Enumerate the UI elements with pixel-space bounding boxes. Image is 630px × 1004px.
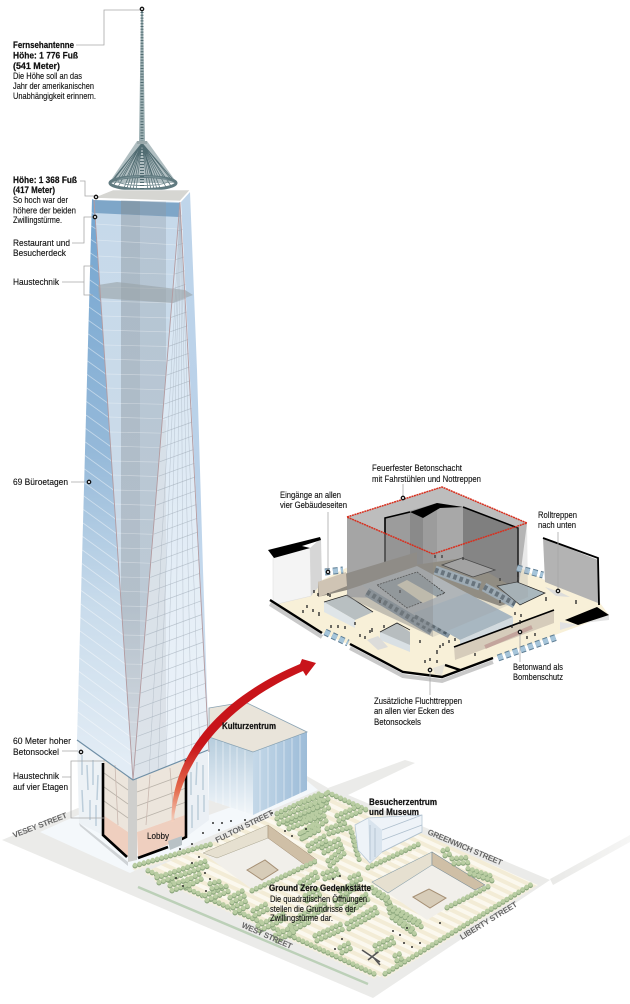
memorial pool: south	[372, 852, 485, 920]
street labels: FULTON STREET	[214, 808, 276, 845]
inset left wall	[268, 537, 322, 605]
podium shards	[82, 755, 204, 828]
tower	[77, 10, 209, 790]
label: restaurant: Besucherdeck	[13, 248, 66, 258]
street labels: LIBERTY STREET	[458, 899, 520, 942]
ground: streets	[2, 760, 630, 998]
podium left panel	[77, 740, 103, 835]
label: lobby: Lobby	[147, 831, 169, 841]
label: emergency stairs: an allen vier Ecken des	[374, 706, 454, 716]
bomb protection wall	[454, 610, 554, 660]
label: entrances	[280, 490, 347, 510]
central pit	[362, 566, 480, 625]
label: memorial	[269, 883, 371, 923]
label: bomb wall: Bombenschutz	[513, 672, 563, 682]
label: emergency stairs: Zusätzliche Fluchttreppen	[374, 696, 462, 706]
label: cultural center: Kulturzentrum	[222, 721, 276, 731]
label: roof height: Zwillingstürme.	[13, 215, 62, 225]
label: roof height: höhere der beiden	[13, 206, 76, 216]
inset corner block	[560, 607, 609, 630]
label: restaurant	[13, 238, 70, 258]
antenna	[139, 10, 145, 142]
core back walls	[347, 487, 528, 606]
central slab	[413, 593, 513, 648]
label: visitor center	[369, 797, 437, 817]
label: concrete base	[13, 736, 71, 757]
concrete walkway wall	[318, 552, 417, 597]
core translucent faces	[347, 517, 528, 637]
leader lines	[62, 7, 560, 818]
label: antenna	[13, 40, 96, 101]
label: escalators: Rolltreppen	[538, 510, 577, 520]
inset right wall	[543, 538, 599, 605]
entrance stone wall	[318, 572, 347, 597]
label: visitor center: Besucherzentrum	[369, 797, 437, 807]
street labels: GREENWICH STREET	[426, 828, 505, 868]
label: emergency stairs	[374, 696, 462, 727]
visitor center and museum	[355, 815, 422, 863]
label: core: mit Fahrstühlen und Nottreppen	[372, 474, 481, 484]
visitors in plaza	[176, 812, 440, 950]
core floor	[415, 558, 528, 606]
label: antenna: Fernsehantenne	[13, 40, 74, 50]
left pit	[324, 595, 373, 628]
podium right panel	[186, 750, 209, 837]
label: antenna: Die Höhe soll an das	[13, 71, 82, 81]
tower site pavement	[40, 780, 318, 873]
label: antenna: (541 Meter)	[13, 61, 60, 71]
inset outer floor edge	[270, 600, 493, 681]
floor lines: front wedge	[95, 224, 179, 751]
right sliver	[181, 192, 209, 752]
people	[303, 555, 576, 663]
label: memorial: Ground Zero Gedenkstätte	[269, 883, 371, 893]
lobby glow	[103, 815, 128, 857]
label: roof height: So hoch war der	[13, 195, 68, 205]
street labels: VESEY STREET	[11, 810, 70, 840]
roof plate	[93, 190, 190, 201]
entrance doors	[325, 568, 557, 658]
right face	[130, 202, 209, 790]
label: concrete base: Betonsockel	[13, 747, 59, 757]
label: antenna: Unabhängigkeit erinnern.	[13, 91, 96, 101]
label: core: Feuerfester Betonschacht	[372, 463, 462, 473]
lower pit	[380, 623, 410, 652]
inset floor	[270, 525, 609, 678]
label: roof height: (417 Meter)	[13, 185, 55, 195]
top band	[93, 200, 180, 217]
label: restaurant: Restaurant und	[13, 238, 70, 248]
plaza	[138, 792, 538, 984]
west street green strip	[138, 887, 368, 984]
label: mechanical floors: Haustechnik	[13, 277, 59, 287]
memorial pool: north	[203, 825, 317, 890]
label: antenna: Jahr der amerikanischen	[13, 81, 94, 91]
trees	[135, 792, 533, 978]
window strips	[367, 570, 515, 634]
front wedge	[94, 200, 180, 790]
sculpture in plaza	[362, 950, 380, 965]
label: antenna: Höhe: 1 776 Fuß	[13, 50, 78, 60]
mechanical floors band	[98, 282, 193, 303]
label: mechanical on four floors	[13, 771, 68, 792]
label: bomb wall: Betonwand als	[513, 662, 563, 672]
label: core	[372, 463, 481, 484]
cultural center	[209, 702, 307, 815]
label: entrances: vier Gebäudeseiten	[280, 500, 347, 510]
floor lines: right face	[134, 216, 208, 766]
red arrow	[171, 659, 316, 822]
label: escalators: nach unten	[538, 520, 576, 530]
label: roof height: Höhe: 1 368 Fuß	[13, 175, 77, 185]
upper gallery	[442, 558, 495, 577]
label: mechanical on four floors: auf vier Etagen	[13, 782, 68, 792]
right pit	[497, 582, 545, 605]
label: emergency stairs: Betonsockels	[374, 717, 421, 727]
street labels	[11, 808, 520, 952]
label: memorial: Zwillingstürme dar.	[270, 913, 333, 923]
core top outline	[347, 487, 527, 554]
tower base edge	[77, 740, 208, 780]
floor lines: left face	[77, 212, 132, 766]
tower edge lines	[94, 200, 209, 780]
label: entrances: Eingänge an allen	[280, 490, 341, 500]
central concrete column	[128, 776, 137, 862]
black wall lines	[103, 760, 186, 858]
label: concrete base: 60 Meter hoher	[13, 736, 71, 746]
label: office floors: 69 Büroetagen	[13, 477, 68, 487]
stairs	[367, 587, 570, 675]
inset: base cutaway	[268, 487, 609, 681]
label: memorial: stellen die Grundrisse der	[270, 904, 356, 914]
left face	[77, 199, 133, 780]
antenna cone	[109, 141, 177, 190]
label: memorial: Die quadratischen Öffnungen	[270, 894, 367, 904]
label: visitor center: und Museum	[369, 807, 419, 817]
concrete podium	[77, 740, 209, 866]
label: mechanical on four floors: Haustechnik	[13, 771, 59, 781]
label: roof height	[13, 175, 77, 225]
street labels: WEST STREET	[240, 921, 295, 952]
label: bomb wall	[513, 662, 563, 682]
label: escalators	[538, 510, 577, 530]
